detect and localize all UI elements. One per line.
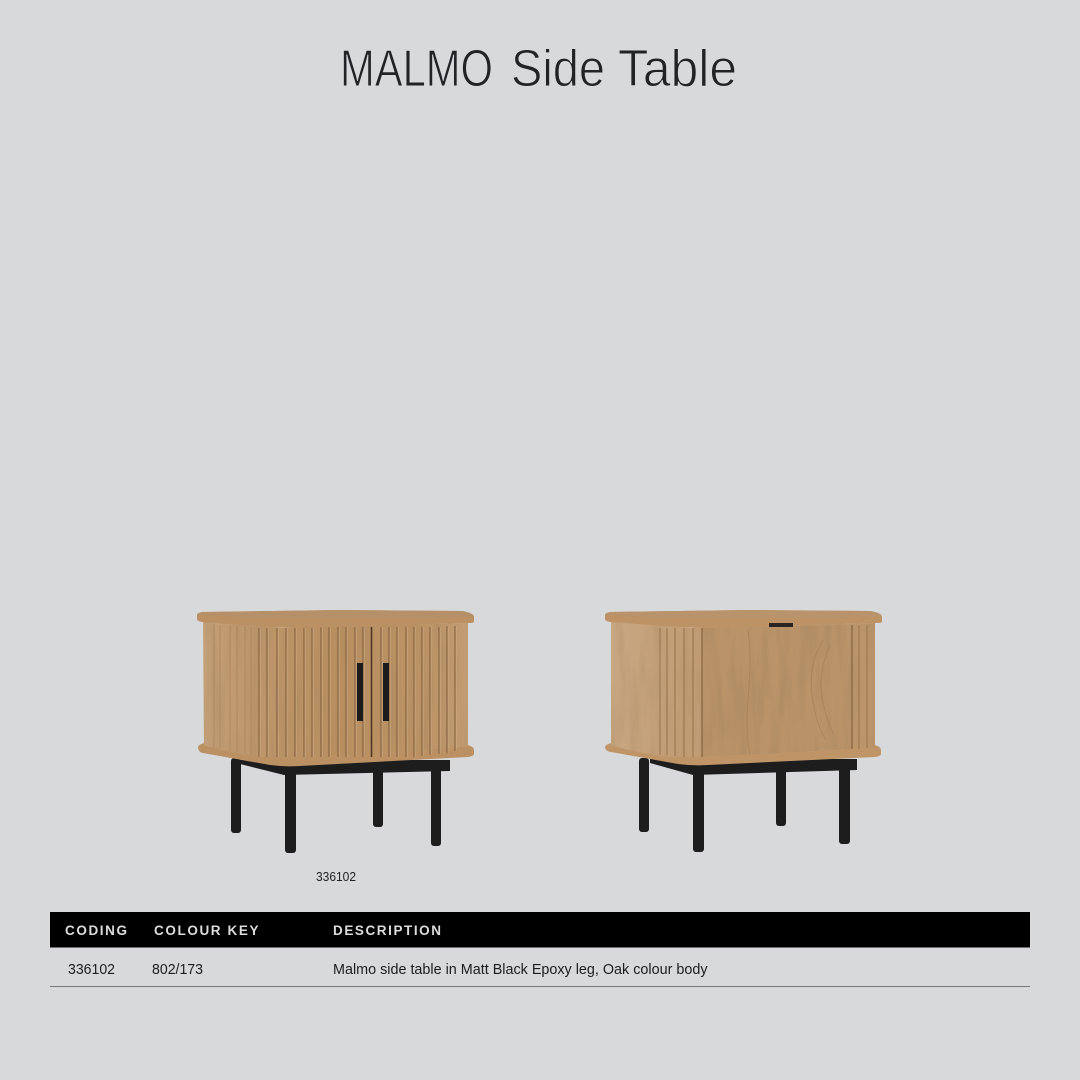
tambour slats bbox=[214, 624, 456, 757]
cabinet body bbox=[611, 621, 875, 757]
table top bbox=[197, 610, 474, 628]
title: Table bbox=[618, 40, 737, 98]
table top bbox=[605, 610, 882, 628]
bottom plate bbox=[198, 743, 474, 766]
table: product coding bbox=[50, 912, 1030, 987]
cell: description: Malmo side table in Matt Black Epoxy leg, Oak colour body bbox=[333, 962, 708, 978]
slat lines bbox=[660, 625, 867, 757]
table header bar bbox=[50, 912, 1030, 948]
cabinet body bbox=[203, 621, 468, 757]
title: MALMO bbox=[340, 40, 493, 98]
cell: colour key: 802/173 bbox=[152, 962, 203, 978]
sliding panel bbox=[702, 625, 852, 757]
legs and frame bbox=[231, 758, 450, 853]
header: coding: CODING bbox=[65, 923, 127, 938]
header: colour key: COLOUR KEY bbox=[154, 923, 258, 938]
latch bbox=[769, 623, 793, 627]
cell: coding: 336102 bbox=[68, 962, 115, 978]
product: side table with doors closed bbox=[197, 610, 474, 853]
title: Side bbox=[511, 40, 605, 98]
header: description: DESCRIPTION bbox=[333, 923, 441, 938]
title bbox=[340, 40, 737, 98]
product: side table with doors open bbox=[605, 610, 882, 852]
product label: 336102 bbox=[316, 870, 356, 884]
door handles bbox=[357, 663, 363, 721]
bottom plate bbox=[605, 743, 881, 765]
wood grain figure bbox=[747, 630, 834, 755]
legs and frame bbox=[639, 758, 857, 852]
